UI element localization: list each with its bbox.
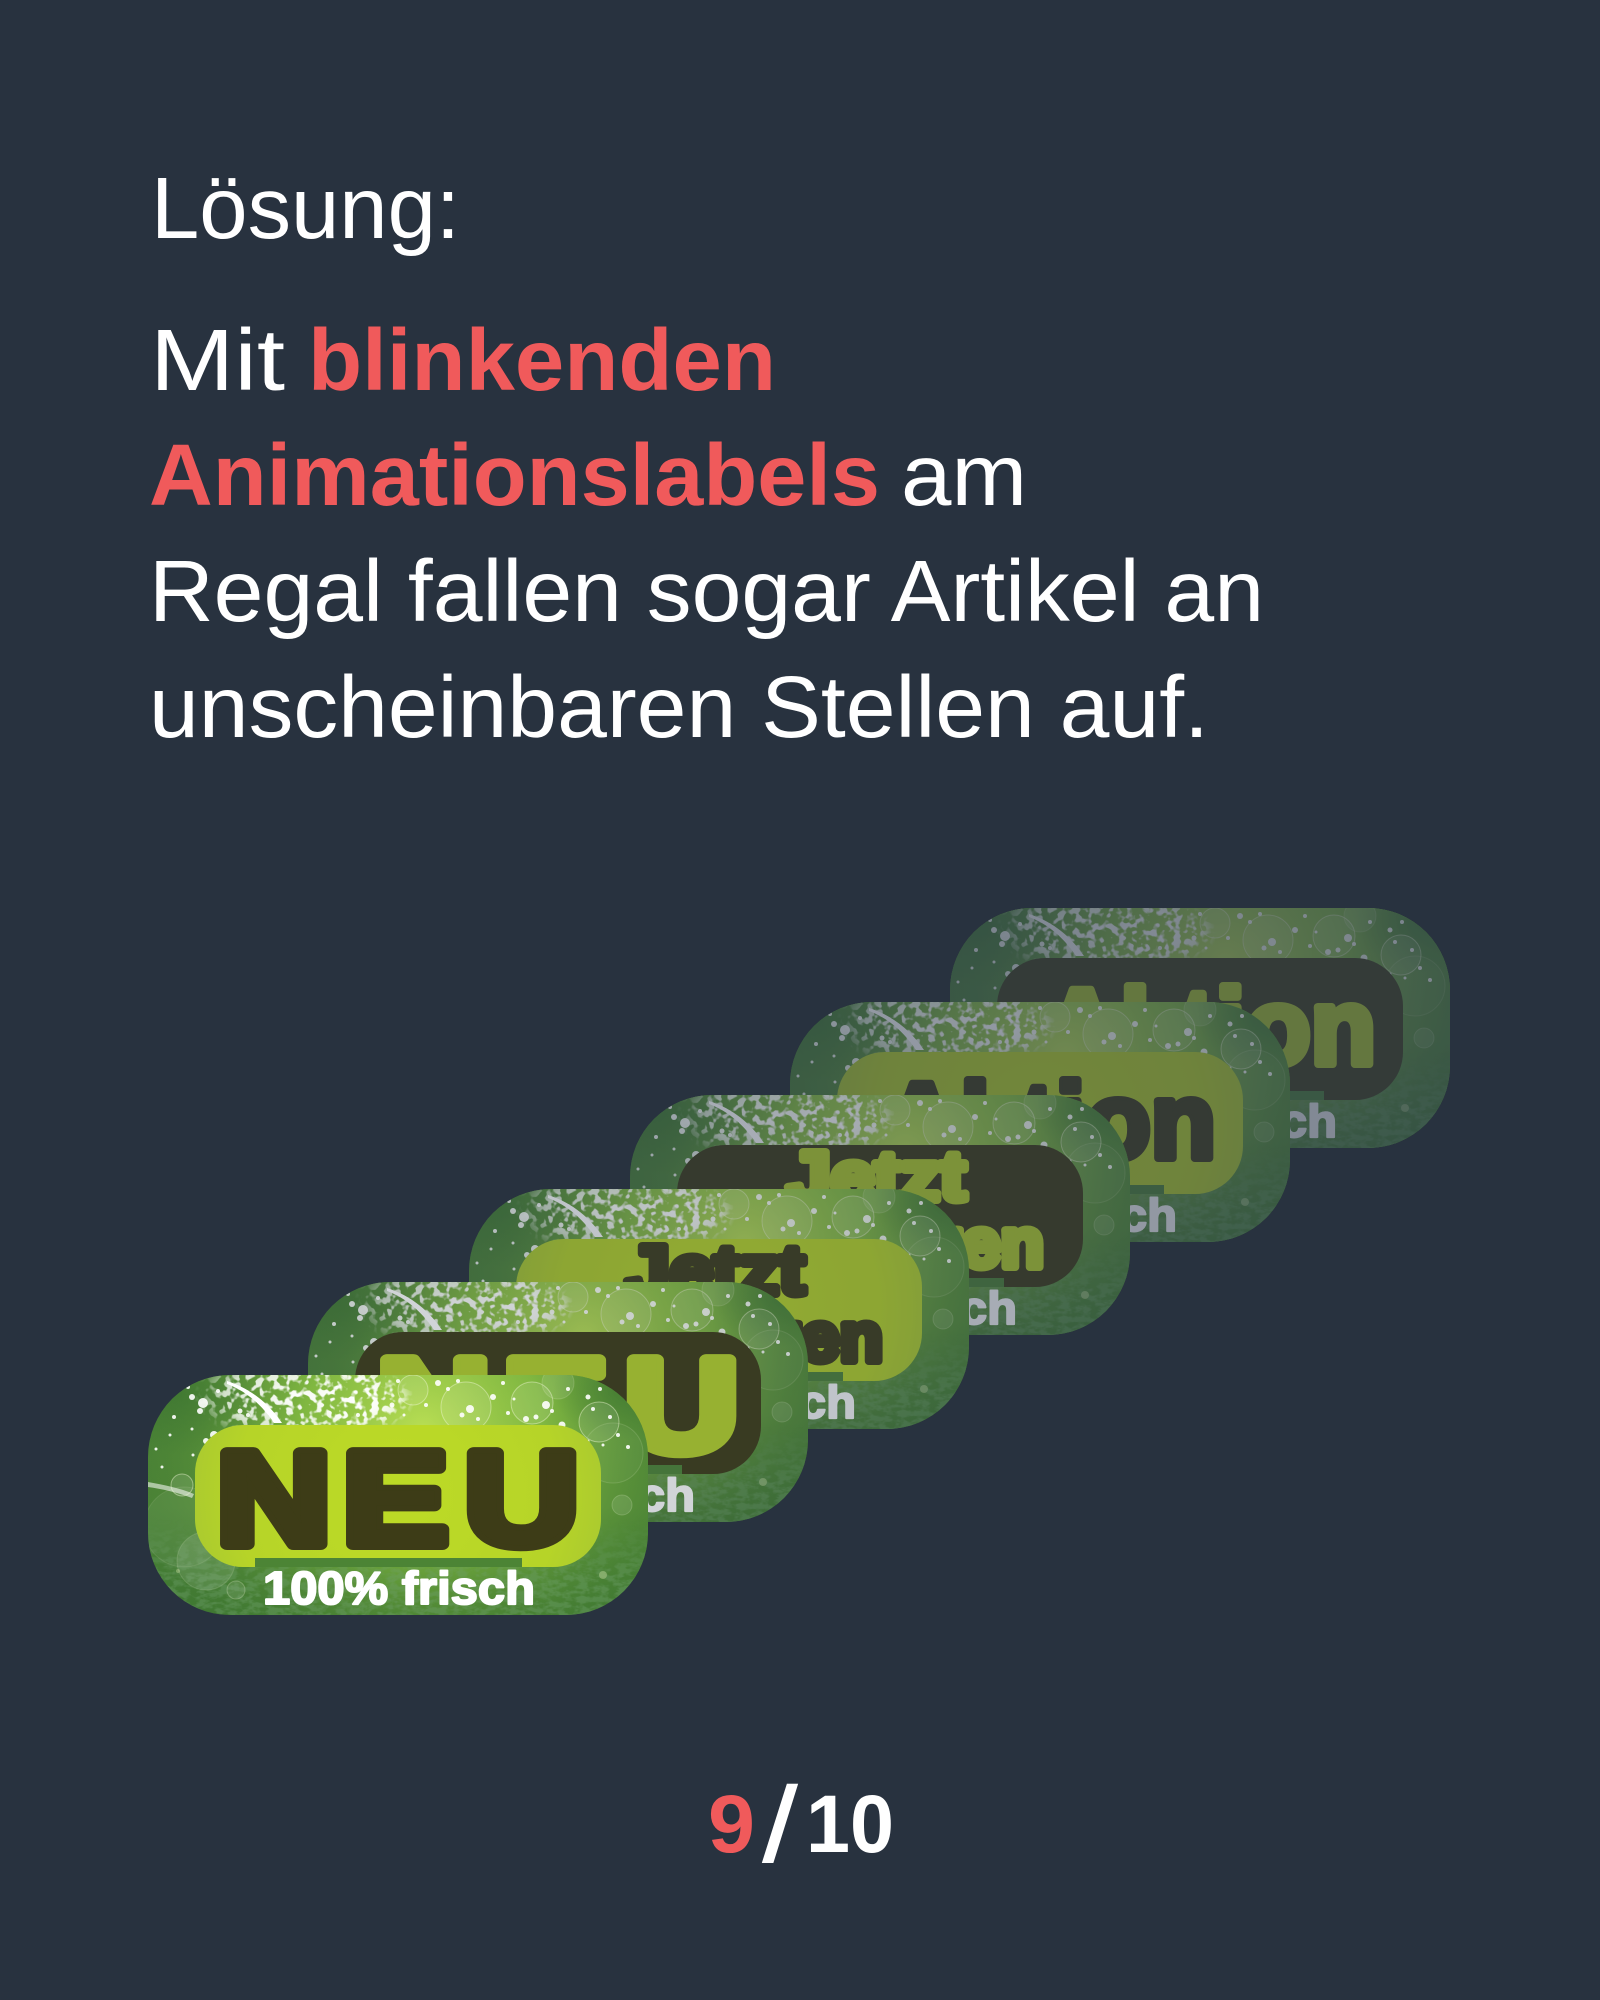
heading: Lösung: Lösung: xyxy=(151,160,460,257)
label stack: animation frames xyxy=(88,868,1495,1615)
label background: green bubbles texture xyxy=(88,1335,693,1615)
label frame 3: Jetzt probieren bright: probieren xyxy=(555,1298,883,1376)
line 1 lead: Mit xyxy=(150,312,285,409)
label frame 3: Jetzt probieren bright: 100% frisch xyxy=(584,1376,856,1428)
label frame 5: Aktion bright: Aktion xyxy=(883,1060,1216,1181)
label frame 3: Jetzt probieren bright: Jetzt xyxy=(626,1231,805,1309)
highlighted word: blinkenden: blinkenden xyxy=(308,312,776,409)
label frame 5: Aktion bright: 100% frisch xyxy=(905,1189,1177,1241)
lime pill xyxy=(195,1425,601,1567)
label frame 2: NEU dark: NEU xyxy=(377,1331,739,1479)
label frame 4: Jetzt probieren dark: Jetzt xyxy=(787,1137,966,1215)
text block: solution statement xyxy=(149,312,1264,756)
line 4: unscheinbaren Stellen auf. xyxy=(149,659,1209,756)
label frame 6: Aktion dark xyxy=(890,868,1495,1148)
line 2 tail: am xyxy=(901,427,1027,524)
line 3: Regal fallen sogar Artikel an xyxy=(149,543,1264,640)
label frame 4: Jetzt probieren dark: 100% frisch xyxy=(745,1282,1017,1334)
tagline: 100% frisch: 100% frisch xyxy=(263,1562,535,1614)
label frame 4: Jetzt probieren dark: probieren xyxy=(716,1204,1044,1282)
label frame 5: Aktion bright xyxy=(730,962,1335,1242)
label frame 2: NEU dark: 100% frisch xyxy=(423,1469,695,1521)
label frame 1: NEU bright xyxy=(88,1335,693,1615)
label frame 2: NEU dark xyxy=(248,1242,853,1522)
highlighted word: Animationslabels: Animationslabels xyxy=(149,427,880,524)
current page: 9 xyxy=(708,1779,755,1870)
label frame 6: Aktion dark: 100% frisch xyxy=(1065,1095,1337,1147)
label frame 6: Aktion dark: Aktion xyxy=(1043,966,1376,1087)
pill notch xyxy=(255,1558,522,1567)
label frame 3: Jetzt probieren bright xyxy=(409,1149,1014,1429)
total pages: 10 xyxy=(806,1779,894,1870)
label frame 4: Jetzt probieren dark xyxy=(570,1055,1175,1335)
slash: / xyxy=(763,1766,798,1884)
NEU wordmark: NEU xyxy=(217,1424,579,1572)
page counter: 9/10 xyxy=(708,1766,894,1884)
